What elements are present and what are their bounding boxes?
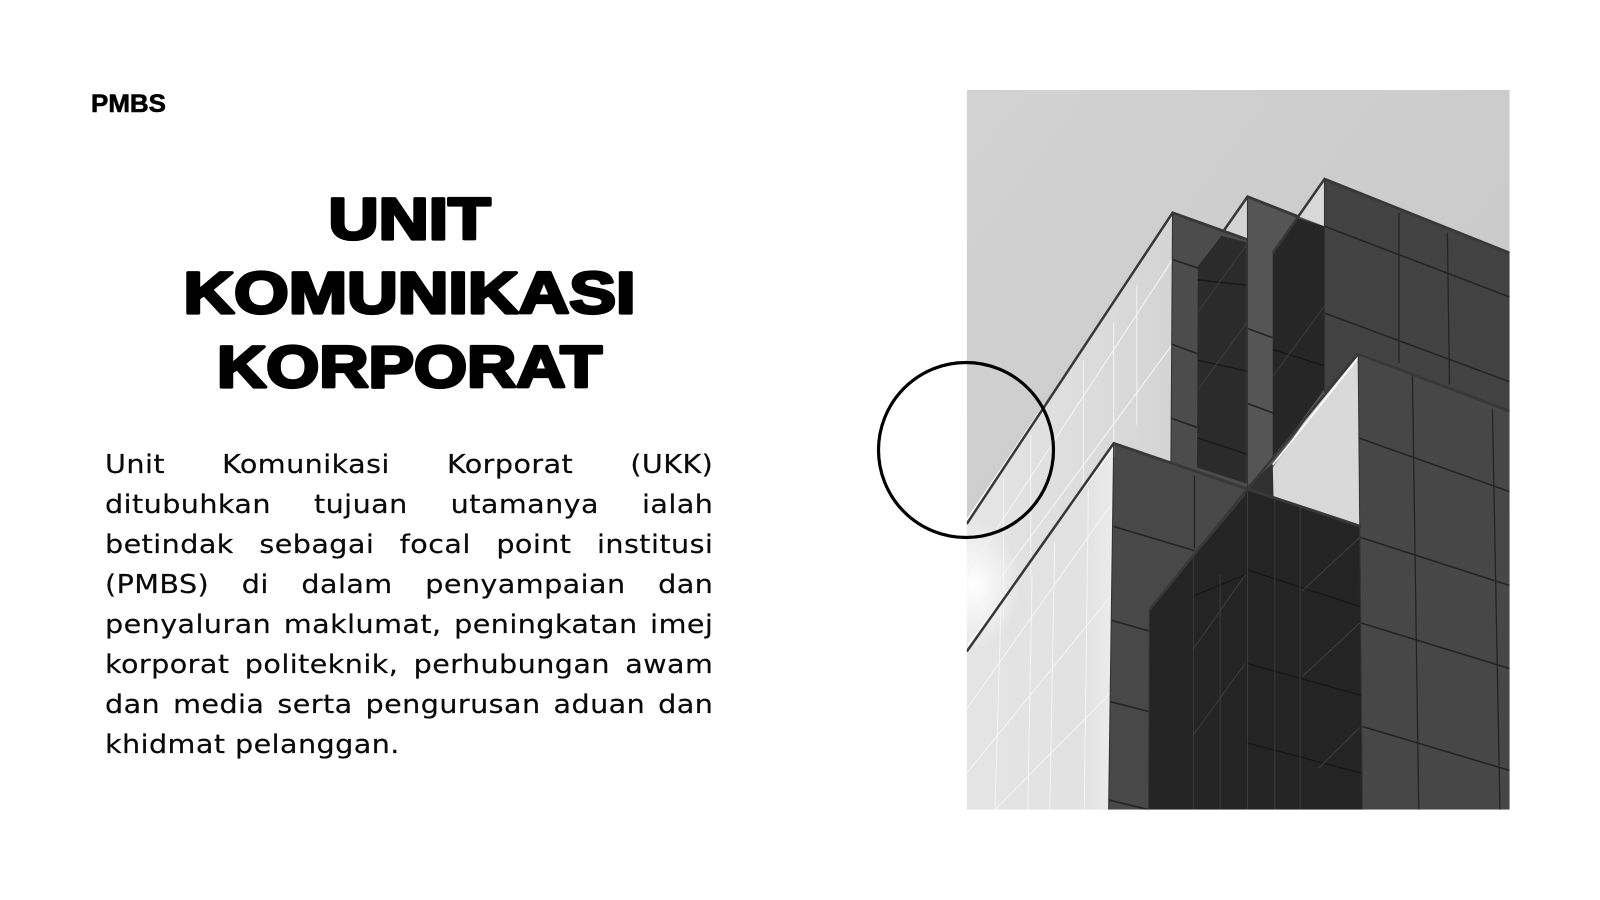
title: KORPORAT xyxy=(217,335,602,400)
body paragraph: betindak sebagai focal point institusi xyxy=(105,530,713,560)
body paragraph: khidmat pelanggan. xyxy=(105,730,400,760)
body paragraph: ditubuhkan tujuan utamanya ialah xyxy=(105,490,713,520)
body paragraph: penyaluran maklumat, peningkatan imej xyxy=(105,610,713,640)
brand label: PMBS: PMBS xyxy=(91,90,166,118)
body paragraph: dan media serta pengurusan aduan dan xyxy=(105,690,713,720)
body paragraph: Unit Komunikasi Korporat (UKK) xyxy=(105,450,713,480)
body paragraph: korporat politeknik, perhubungan awam xyxy=(105,650,713,680)
photo: black and white building xyxy=(966,90,1510,810)
title: UNIT xyxy=(328,187,491,252)
body paragraph: (PMBS) di dalam penyampaian dan xyxy=(105,570,713,600)
body paragraph xyxy=(105,450,713,760)
title: KOMUNIKASI xyxy=(184,261,636,326)
title xyxy=(184,187,636,400)
